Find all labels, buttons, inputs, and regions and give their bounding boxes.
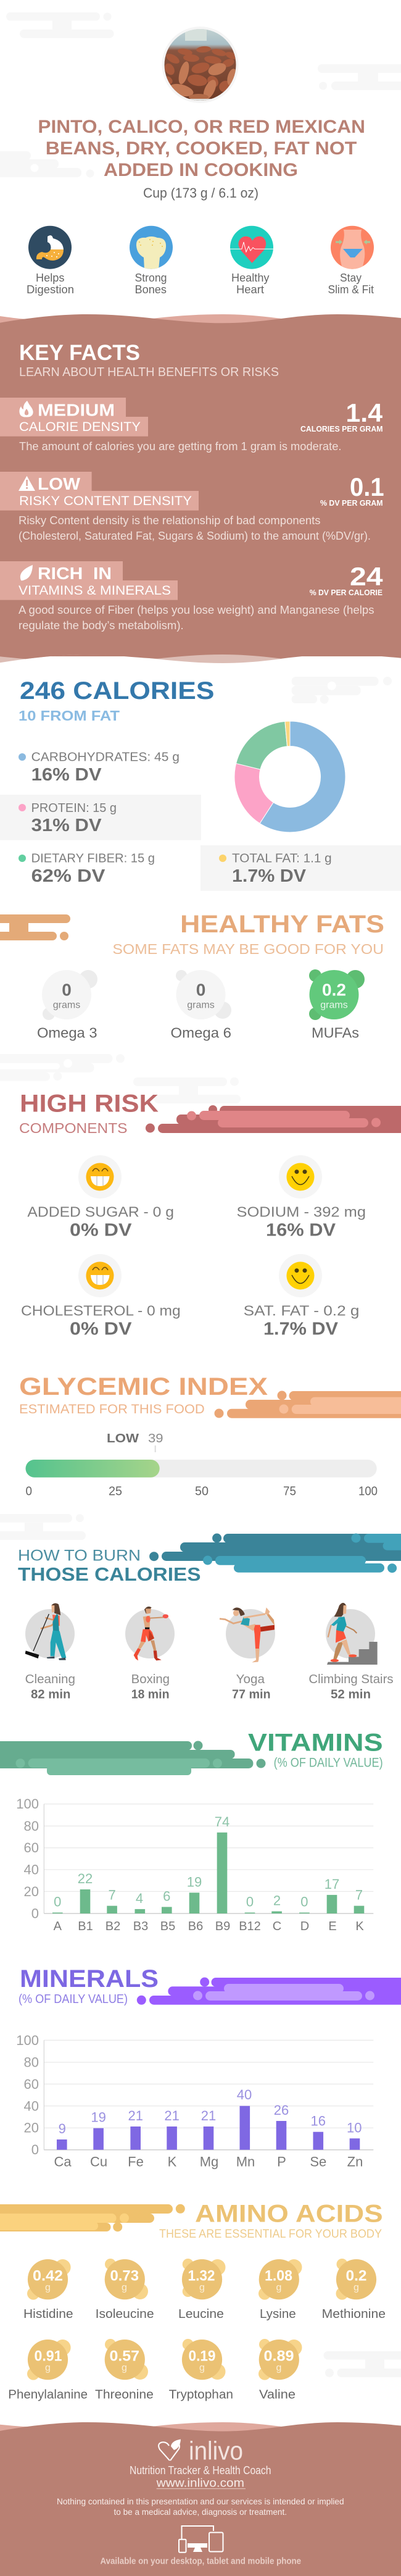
amino: valine: 0.89 xyxy=(264,2348,294,2365)
bar chart: minerals: 0 xyxy=(31,2142,39,2157)
amino: lysine: 1.08 xyxy=(265,2268,292,2285)
blob: healthy fats xyxy=(0,914,70,940)
activity: climbing stairs: 52 min xyxy=(331,1688,371,1702)
fact: calorie density: CALORIES PER GRAM xyxy=(300,424,382,433)
label: healthy heart: Heart xyxy=(236,283,264,296)
component: cholesterol: CHOLESTEROL - 0 mg xyxy=(21,1303,181,1319)
fact: calorie density: MEDIUM xyxy=(38,400,115,419)
title: ADDED IN COOKING xyxy=(104,160,298,180)
legend: carbohydrates: CARBOHYDRATES: 45 g xyxy=(31,750,180,764)
bar chart: minerals: 19 xyxy=(91,2110,106,2125)
amino: leucine: 1.32 xyxy=(188,2268,215,2285)
bar chart: vitamins: 7 xyxy=(108,1888,116,1903)
icon: strong bones xyxy=(130,226,173,270)
amino: isoleucine: Isoleucine xyxy=(96,2307,154,2321)
legend: dietary fiber: DIETARY FIBER: 15 g xyxy=(31,851,155,866)
heading: how to burn those calories xyxy=(18,1547,201,1585)
component: saturated fat: 1.7% DV xyxy=(263,1319,339,1339)
stat: omega 3: 0 xyxy=(62,981,72,1000)
bar chart: vitamins: 60 xyxy=(24,1840,39,1855)
bar chart: minerals: Mg xyxy=(200,2154,218,2169)
fact: risky content density: 0.1 xyxy=(350,472,384,501)
amino: threonine: Threonine xyxy=(95,2388,154,2401)
heading: high risk: HIGH RISK xyxy=(20,1090,159,1118)
bar chart: vitamins: B3 xyxy=(133,1920,148,1933)
heading: healthy fats xyxy=(112,911,384,957)
bar chart: vitamins: 19 xyxy=(187,1874,202,1889)
bar chart: minerals: 9 xyxy=(59,2121,66,2136)
bar chart: vitamins: 100 xyxy=(16,1796,39,1812)
text: tagline and website: www.inlivo.com xyxy=(156,2477,244,2490)
text: disclaimer xyxy=(57,2496,344,2517)
fact: calorie density: CALORIE DENSITY xyxy=(19,419,141,434)
bar chart: minerals: 100 xyxy=(16,2033,39,2048)
heading: vitamins: (% OF DAILY VALUE) xyxy=(274,1756,383,1770)
amino: methionine xyxy=(322,2259,386,2321)
amino: methionine: 0.2 xyxy=(345,2268,366,2285)
stat: mufas: MUFAs xyxy=(312,1025,359,1041)
fact: rich in vitamins and minerals xyxy=(0,561,383,632)
legend: total fat: 1.7% DV xyxy=(232,866,307,886)
heading: glycemic index xyxy=(19,1373,268,1416)
stat: mufas xyxy=(309,969,365,1041)
bar chart: vitamins: E xyxy=(328,1920,337,1933)
heading: minerals: (% OF DAILY VALUE) xyxy=(19,1992,128,2006)
icon: warning xyxy=(19,476,35,491)
heading: glycemic index: GLYCEMIC INDEX xyxy=(19,1373,268,1400)
heading: key facts: LEARN ABOUT HEALTH BENEFITS OR RISKS xyxy=(19,366,279,379)
amino: lysine: g xyxy=(276,2283,281,2293)
bar chart: vitamins: 0 xyxy=(54,1894,61,1909)
activity: boxing xyxy=(125,1607,175,1702)
title xyxy=(38,117,365,180)
heading: minerals: MINERALS xyxy=(20,1965,159,1993)
blob: glycemic index xyxy=(215,1390,401,1418)
legend: protein xyxy=(0,795,201,840)
heading: calories: 246 CALORIES xyxy=(20,677,214,705)
bar chart: vitamins: 0 xyxy=(31,1905,39,1922)
bar chart: vitamins: 22 xyxy=(78,1871,93,1886)
fact: rich in vitamins and minerals: % DV PER CALORIE xyxy=(310,588,382,597)
glycemic gauge: 100 xyxy=(358,1485,378,1499)
amino: isoleucine xyxy=(96,2259,154,2321)
activity: climbing stairs xyxy=(308,1603,394,1702)
heading: amino acids: AMINO ACIDS xyxy=(195,2200,383,2227)
icon: healthy heart xyxy=(230,226,273,269)
heading: healthy fats: HEALTHY FATS xyxy=(180,911,384,938)
heading: calories: 10 FROM FAT xyxy=(19,708,120,724)
component: sodium xyxy=(237,1155,366,1240)
legend: dietary fiber: 62% DV xyxy=(31,866,105,886)
component: saturated fat xyxy=(244,1254,359,1339)
heading: vitamins: VITAMINS xyxy=(248,1729,383,1757)
fact: calorie density xyxy=(0,398,383,453)
label: strong bones: Strong xyxy=(134,272,167,284)
bar chart: minerals: K xyxy=(168,2154,177,2169)
bar chart: vitamins: B12 xyxy=(239,1920,261,1933)
bar chart: vitamins: A xyxy=(54,1920,62,1933)
heading: key facts xyxy=(19,341,279,379)
stat: omega 6: Omega 6 xyxy=(170,1025,231,1041)
title: PINTO, CALICO, OR RED MEXICAN xyxy=(38,117,365,137)
bar chart: vitamins: 0 xyxy=(300,1894,308,1909)
legend: carbohydrates xyxy=(19,750,180,785)
fact: risky content density: % DV PER GRAM xyxy=(320,498,383,508)
activity: yoga xyxy=(220,1607,275,1702)
logo: inlivo: inlivo xyxy=(189,2436,243,2465)
heading: amino acids xyxy=(159,2200,383,2241)
bar chart: minerals: 21 xyxy=(164,2108,180,2123)
text: disclaimer: to be a medical advice, diagnosis or treatment. xyxy=(114,2507,287,2517)
amino: leucine xyxy=(178,2259,226,2321)
activity: cleaning: Cleaning xyxy=(25,1673,75,1686)
text: availability: Available on your desktop, tablet and mobile phone xyxy=(100,2556,301,2566)
stat: omega 6: grams xyxy=(187,1000,215,1011)
bar chart: minerals: 80 xyxy=(24,2055,39,2070)
component: sodium: 16% DV xyxy=(266,1221,336,1240)
heading: high risk xyxy=(19,1090,159,1136)
label: helps digestion xyxy=(27,272,74,296)
logo: inlivo xyxy=(159,2436,243,2465)
heading: healthy fats: SOME FATS MAY BE GOOD FOR YOU xyxy=(112,941,384,957)
bar chart: vitamins: B5 xyxy=(160,1920,175,1933)
bar chart: vitamins: 74 xyxy=(215,1814,229,1830)
amino: methionine: g xyxy=(353,2283,359,2293)
glycemic gauge: 50 xyxy=(195,1485,209,1499)
bar chart: vitamins: 17 xyxy=(325,1876,339,1892)
legend: carbohydrates: 16% DV xyxy=(31,765,102,785)
bar chart: vitamins: K xyxy=(355,1920,364,1933)
stat: mufas: grams xyxy=(320,1000,348,1011)
fact: rich in vitamins and minerals: A good source of Fiber (helps you lose weight) and Manganese (helps xyxy=(19,604,374,616)
panel: footer xyxy=(0,2422,401,2576)
fact: risky content density: LOW xyxy=(38,474,81,493)
heading: how to burn those calories: HOW TO BURN xyxy=(18,1547,141,1564)
bar chart: minerals: 26 xyxy=(274,2102,289,2118)
fact: calorie density: The amount of calories you are getting from 1 gram is moderate. xyxy=(19,440,342,453)
heading: glycemic index: ESTIMATED FOR THIS FOOD xyxy=(19,1402,205,1416)
glycemic gauge: 39 xyxy=(148,1432,163,1445)
bar chart: minerals: 21 xyxy=(128,2108,143,2123)
bar chart: minerals: Zn xyxy=(347,2154,363,2169)
bar chart: minerals: 60 xyxy=(24,2076,39,2092)
label: helps digestion: Digestion xyxy=(27,283,74,296)
label: strong bones xyxy=(134,272,167,296)
label: stay slim and fit: Slim & Fit xyxy=(328,283,374,296)
glycemic gauge xyxy=(26,1432,378,1499)
amino: phenylalanine: 0.91 xyxy=(35,2348,62,2365)
bar chart: minerals xyxy=(16,2033,373,2169)
amino: histidine: g xyxy=(45,2283,51,2293)
amino: valine: g xyxy=(276,2362,281,2373)
label: stay slim and fit: Stay xyxy=(340,272,362,284)
bar chart: vitamins: 80 xyxy=(24,1818,39,1834)
activity: yoga: Yoga xyxy=(236,1673,265,1686)
bar chart: vitamins: B1 xyxy=(78,1920,93,1933)
stat: omega 3: Omega 3 xyxy=(37,1025,97,1041)
fact: risky content density xyxy=(0,472,384,542)
heading: key facts: KEY FACTS xyxy=(19,341,140,365)
component: sodium: SODIUM - 392 mg xyxy=(237,1204,366,1220)
amino: valine: Valine xyxy=(259,2388,296,2401)
stat: omega 6 xyxy=(170,970,231,1041)
bar chart: vitamins: 6 xyxy=(163,1888,170,1904)
amino: threonine: 0.57 xyxy=(110,2348,139,2365)
label: stay slim and fit xyxy=(328,272,374,296)
activity: cleaning: 82 min xyxy=(31,1688,70,1702)
heading: calories xyxy=(19,677,214,724)
component: added sugar: ADDED SUGAR - 0 g xyxy=(27,1204,174,1220)
stat: omega 3 xyxy=(37,970,97,1041)
fact: rich in vitamins and minerals: 24 xyxy=(350,562,383,591)
icon: leaf xyxy=(20,565,33,580)
activity: boxing: 18 min xyxy=(131,1688,169,1702)
label: strong bones: Bones xyxy=(134,283,167,296)
amino: tryptophan: 0.19 xyxy=(189,2348,216,2365)
bar chart: minerals: 21 xyxy=(201,2108,216,2123)
fact: rich in vitamins and minerals: VITAMINS & MINERALS xyxy=(19,583,171,598)
component: saturated fat: SAT. FAT - 0.2 g xyxy=(244,1303,359,1319)
stat: mufas: 0.2 xyxy=(322,981,346,1000)
bar chart: vitamins: 0 xyxy=(246,1894,254,1909)
heading: amino acids: THESE ARE ESSENTIAL FOR YOUR BODY xyxy=(159,2228,382,2241)
bar chart: vitamins: D xyxy=(300,1920,309,1933)
amino: leucine: g xyxy=(199,2283,205,2293)
label: helps digestion: Helps xyxy=(36,272,64,284)
blob: minerals xyxy=(137,1977,401,2005)
stat: omega 6: 0 xyxy=(196,981,205,1000)
amino: tryptophan: g xyxy=(199,2362,205,2373)
activity: yoga: 77 min xyxy=(232,1688,271,1702)
legend: protein: PROTEIN: 15 g xyxy=(31,801,117,815)
bar chart: vitamins: 2 xyxy=(273,1893,281,1908)
blob: vitamins xyxy=(0,1741,265,1775)
component: added sugar: 0% DV xyxy=(70,1221,132,1240)
bar chart: vitamins: B6 xyxy=(188,1920,203,1933)
fact: calorie density: 1.4 xyxy=(345,398,383,427)
amino: isoleucine: g xyxy=(122,2283,127,2293)
amino: lysine xyxy=(258,2259,302,2321)
bar chart: minerals: P xyxy=(277,2154,286,2169)
amino: leucine: Leucine xyxy=(178,2307,224,2321)
bar chart: vitamins: B2 xyxy=(105,1920,120,1933)
component: cholesterol: 0% DV xyxy=(70,1319,132,1339)
amino: phenylalanine: Phenylalanine xyxy=(8,2388,88,2401)
blob: high risk xyxy=(146,1105,401,1133)
amino: valine xyxy=(258,2339,302,2401)
icon: stay slim and fit xyxy=(331,226,374,270)
blob: how to burn xyxy=(149,1534,401,1573)
component: added sugar xyxy=(27,1155,174,1240)
bar chart: vitamins: C xyxy=(273,1920,281,1933)
fact: risky content density: (Cholesterol, Saturated Fat, Sugars & Sodium) to the amount (%DV/gr). xyxy=(19,530,371,542)
bar chart: vitamins: B9 xyxy=(215,1920,230,1933)
glycemic gauge: LOW xyxy=(107,1432,139,1445)
bar chart: minerals: 40 xyxy=(237,2087,252,2102)
fact: risky content density: Risky Content density is the relationship of bad components xyxy=(19,514,321,527)
bar chart: vitamins: 7 xyxy=(355,1888,363,1903)
amino: isoleucine: 0.73 xyxy=(110,2268,139,2285)
text: tagline and website xyxy=(130,2464,271,2490)
legend: total fat xyxy=(200,845,401,891)
icon: flame xyxy=(19,401,33,417)
text: disclaimer: Nothing contained in this presentation and our services is intended or implied xyxy=(57,2496,344,2506)
bar chart: minerals: Cu xyxy=(90,2154,107,2169)
amino: threonine xyxy=(95,2339,154,2401)
activity: cleaning xyxy=(25,1604,75,1702)
heading: how to burn those calories: THOSE CALORIES xyxy=(18,1563,201,1585)
fact: risky content density: RISKY CONTENT DENSITY xyxy=(19,493,192,508)
amino: histidine xyxy=(23,2259,73,2321)
icon: helps digestion xyxy=(28,226,72,269)
bar chart: vitamins: 20 xyxy=(24,1884,39,1899)
amino: tryptophan: Tryptophan xyxy=(169,2388,233,2401)
bar chart: vitamins: 40 xyxy=(24,1862,39,1877)
amino: tryptophan xyxy=(169,2339,233,2401)
component: cholesterol xyxy=(21,1254,181,1339)
panel: key facts xyxy=(0,314,401,663)
text: tagline and website: Nutrition Tracker & Health Coach xyxy=(130,2464,271,2477)
photo: red beans xyxy=(162,27,238,103)
icon: devices xyxy=(179,2526,223,2553)
bar chart: minerals: Se xyxy=(310,2154,326,2169)
amino: phenylalanine: g xyxy=(45,2362,51,2373)
amino: threonine: g xyxy=(122,2362,127,2373)
bar chart: minerals: Fe xyxy=(128,2154,144,2169)
heading: minerals xyxy=(19,1965,159,2006)
amino: lysine: Lysine xyxy=(260,2307,296,2321)
label: healthy heart xyxy=(231,272,269,296)
amino: histidine: Histidine xyxy=(23,2307,73,2321)
amino: histidine: 0.42 xyxy=(33,2268,63,2285)
activity: climbing stairs: Climbing Stairs xyxy=(308,1673,394,1686)
bar chart: minerals: 10 xyxy=(347,2120,362,2135)
label: healthy heart: Healthy xyxy=(231,272,269,284)
heading: high risk: COMPONENTS xyxy=(19,1120,127,1136)
amino: phenylalanine xyxy=(8,2340,88,2401)
bar chart: minerals: Mn xyxy=(236,2154,255,2169)
bar chart: vitamins xyxy=(16,1796,373,1933)
glycemic gauge: 25 xyxy=(109,1485,122,1499)
activity: boxing: Boxing xyxy=(131,1673,170,1686)
bar chart: minerals: 20 xyxy=(24,2120,39,2136)
amino: methionine: Methionine xyxy=(322,2307,386,2321)
legend: dietary fiber xyxy=(19,851,155,886)
fact: rich in vitamins and minerals: regulate the body’s metabolism). xyxy=(19,619,184,632)
bar chart: minerals: 16 xyxy=(311,2114,326,2129)
donut chart xyxy=(234,721,345,832)
fact: rich in vitamins and minerals: RICH IN xyxy=(38,564,112,583)
heading: vitamins xyxy=(248,1729,383,1770)
bar chart: minerals: Ca xyxy=(54,2154,72,2169)
stat: omega 3: grams xyxy=(53,1000,80,1011)
glycemic gauge: 0 xyxy=(26,1485,32,1499)
title: BEANS, DRY, COOKED, FAT NOT xyxy=(46,138,357,159)
legend: protein: 31% DV xyxy=(31,816,102,835)
bar chart: vitamins: 4 xyxy=(136,1891,143,1906)
glycemic gauge: 75 xyxy=(283,1485,296,1499)
serving size: Cup (173 g / 6.1 oz) xyxy=(143,185,258,201)
blob: amino acids xyxy=(0,2204,185,2231)
bar chart: minerals: 40 xyxy=(24,2098,39,2114)
legend: total fat: TOTAL FAT: 1.1 g xyxy=(232,851,332,866)
